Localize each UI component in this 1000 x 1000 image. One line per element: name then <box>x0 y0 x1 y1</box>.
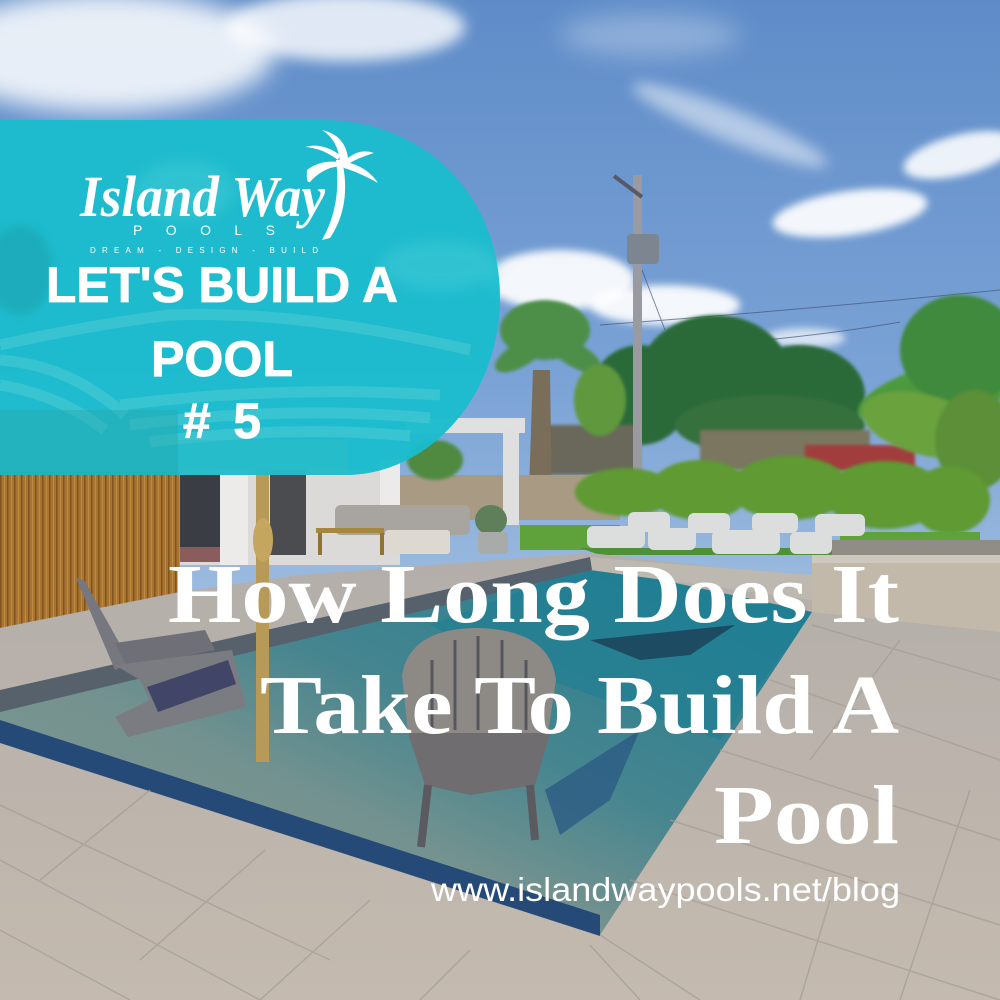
neighbouring houses <box>540 425 640 475</box>
panel heading: # 5 <box>183 393 261 449</box>
title: Pool <box>714 769 899 862</box>
outdoor sofa <box>316 505 508 555</box>
pool water <box>0 565 812 935</box>
title: Take To Build A <box>260 659 899 752</box>
spa wall <box>812 540 1000 633</box>
panel heading: POOL <box>151 331 293 387</box>
logo tagline: DREAM - DESIGN - BUILD <box>90 246 318 255</box>
logo: Island Way Pools <box>79 130 378 255</box>
chair shadow in water <box>545 730 640 835</box>
teal banner panel <box>0 120 500 475</box>
utility pole <box>614 175 659 473</box>
icon: palm tree <box>305 130 378 240</box>
umbrella pole <box>253 470 273 762</box>
left chair <box>76 578 246 737</box>
fence and hedge <box>400 475 620 520</box>
panel heading: LET'S BUILD A <box>46 257 398 313</box>
logo wordmark: Island Way <box>79 164 325 229</box>
right palm tree <box>851 295 1000 490</box>
tree seen through panel <box>0 225 52 315</box>
lounge cushions <box>587 512 865 554</box>
distant trees <box>590 315 865 455</box>
wires <box>600 270 1000 350</box>
clouds seen through panel <box>135 160 235 220</box>
logo subtitle: POOLS <box>133 222 275 238</box>
left palm tree <box>490 300 626 520</box>
house <box>178 418 525 565</box>
paving joints <box>0 625 1000 1000</box>
lawn <box>520 525 980 550</box>
panel heading <box>46 257 398 449</box>
sky <box>0 0 1000 640</box>
fence seen through panel <box>0 410 178 475</box>
pool edge <box>0 557 592 712</box>
title <box>168 548 899 862</box>
umbrella seen through panel <box>0 314 470 442</box>
dark band of pool step <box>0 720 600 936</box>
clouds <box>0 0 1000 348</box>
right chair <box>402 628 556 847</box>
deck <box>0 553 1000 1000</box>
bamboo fence <box>0 470 180 628</box>
title: How Long Does It <box>168 548 899 641</box>
website url: www.islandwaypools.net/blog <box>430 871 900 908</box>
